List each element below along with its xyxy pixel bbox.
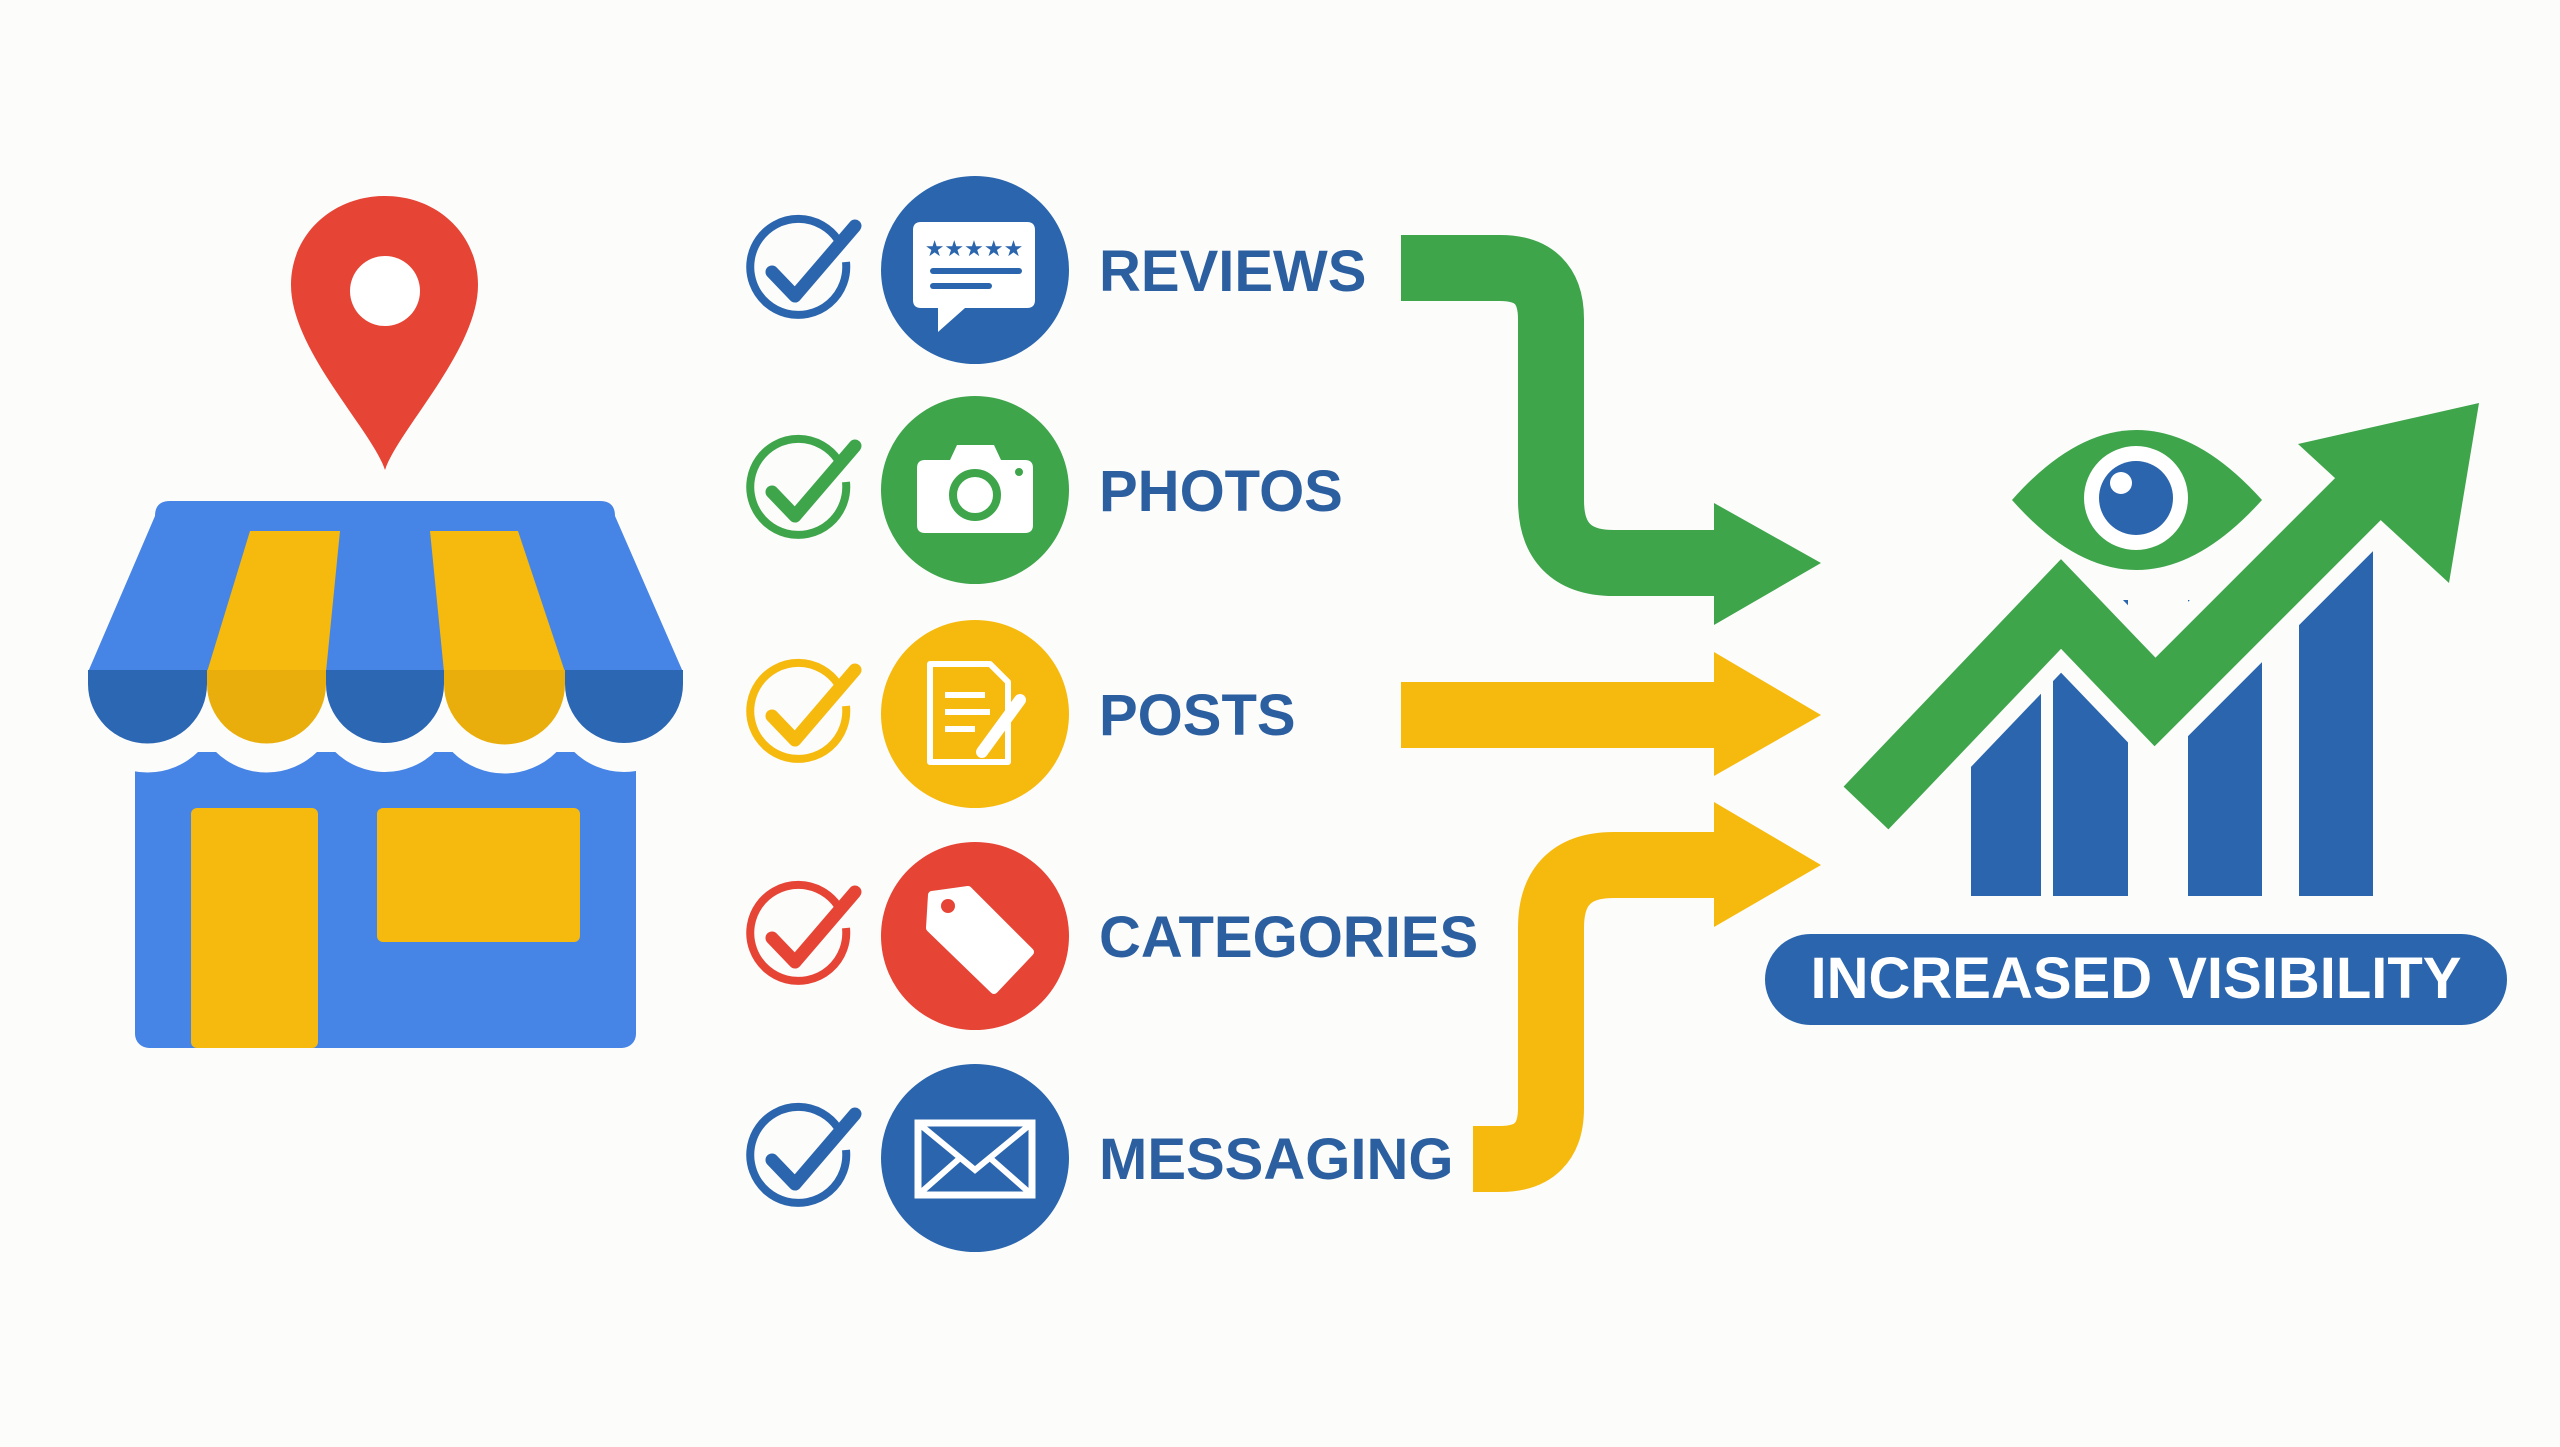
row icons: reviews: ★★★★★	[925, 237, 1023, 262]
row icons: posts	[750, 620, 1069, 808]
row icons: reviews	[750, 176, 1069, 364]
row icons: photos	[750, 396, 1069, 584]
arrow: yellow from messaging	[1473, 802, 1821, 1159]
chart: visibility growth	[1866, 403, 2479, 896]
text: increased visibility: INCREASED VISIBILITY	[1810, 946, 2461, 1011]
icon: storefront	[75, 501, 696, 1048]
text: categories: CATEGORIES	[1099, 905, 1478, 970]
row icons: categories	[750, 842, 1069, 1030]
text: photos: PHOTOS	[1099, 459, 1343, 524]
text: reviews: REVIEWS	[1099, 239, 1366, 304]
text: posts: POSTS	[1099, 683, 1296, 748]
row icons: messaging	[750, 1064, 1069, 1252]
text: messaging: MESSAGING	[1099, 1127, 1454, 1192]
icon: map pin	[291, 196, 478, 470]
arrow: yellow from posts	[1401, 652, 1821, 776]
arrow: green from reviews	[1401, 268, 1821, 625]
label pill: increased visibility	[1765, 934, 2507, 1025]
icon: eye	[2012, 430, 2262, 570]
